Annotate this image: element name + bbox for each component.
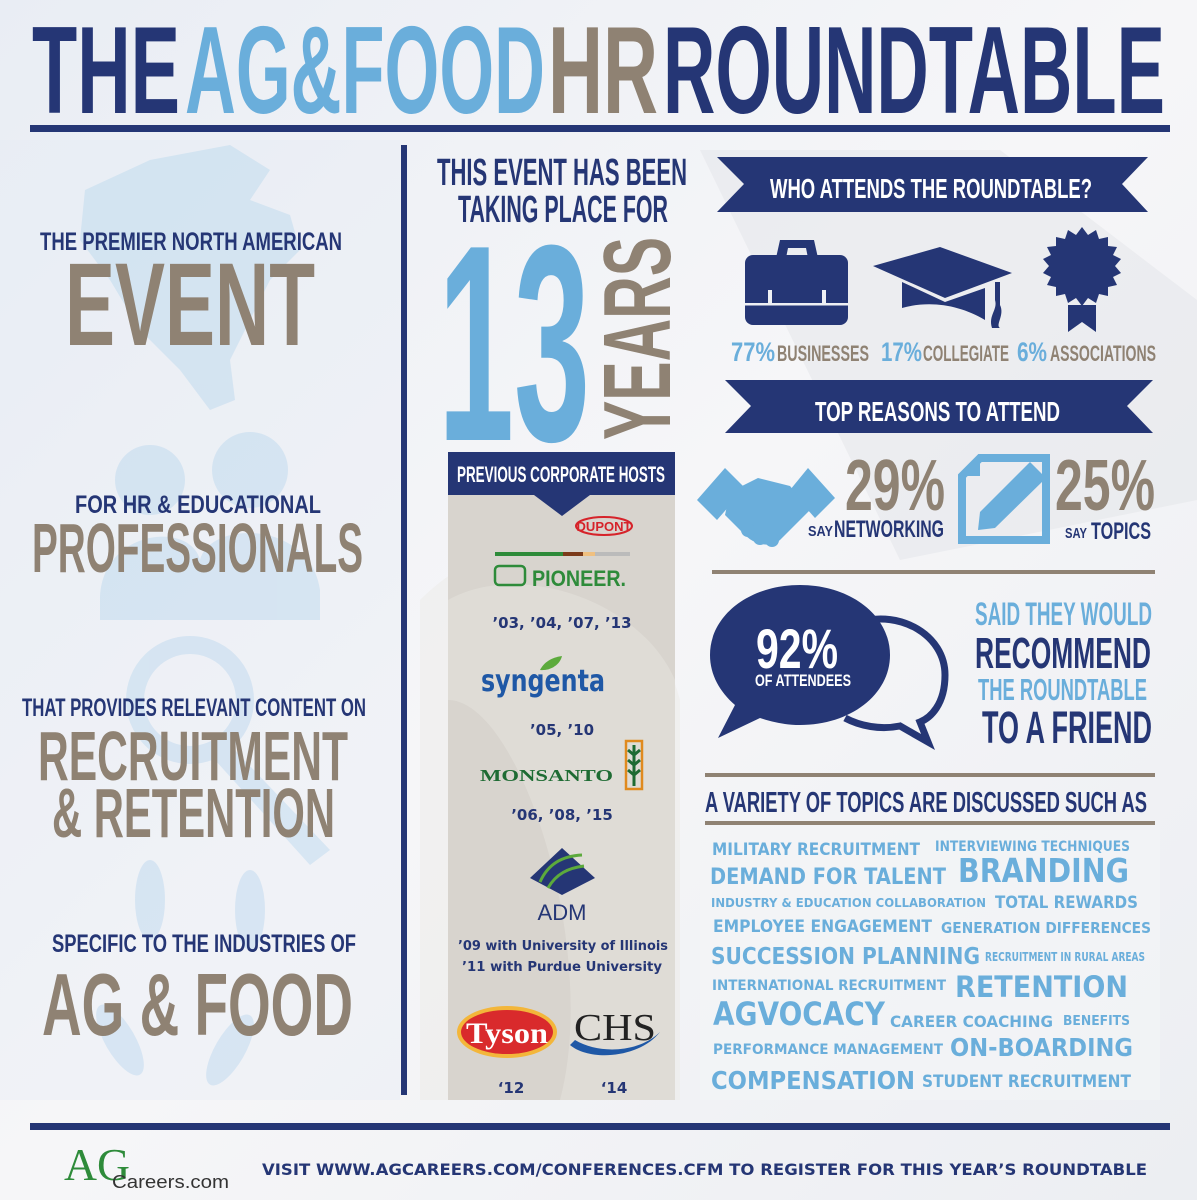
stat: networking: SAY xyxy=(808,523,833,540)
logo: agcareers xyxy=(64,1139,229,1192)
word cloud: topics: PERFORMANCE MANAGEMENT xyxy=(713,1042,943,1058)
logo: adm xyxy=(530,848,595,925)
icon: briefcase xyxy=(745,240,848,325)
word cloud: topics: EMPLOYEE ENGAGEMENT xyxy=(713,917,932,937)
logo: dupont pioneer: PIONEER. xyxy=(532,566,626,591)
stats: attendees breakdown xyxy=(731,337,1156,367)
stat: topics: SAY xyxy=(1065,525,1087,542)
logo: syngenta xyxy=(481,656,605,699)
title: HR xyxy=(548,2,658,140)
panel: previous corporate hosts: PREVIOUS CORPORATE HOSTS xyxy=(457,462,665,487)
13 years block: YEARS xyxy=(584,237,691,440)
word cloud: topics: RETENTION xyxy=(955,970,1128,1004)
text: professionals: PROFESSIONALS xyxy=(32,509,363,587)
text: recruitment & retention: & RETENTION xyxy=(52,774,335,852)
word cloud: topics: MILITARY RECRUITMENT xyxy=(712,840,920,860)
logo: adm: ADM xyxy=(538,900,586,925)
panel: previous corporate hosts: ’09 with University of Illinois xyxy=(458,938,668,954)
word cloud: topics xyxy=(700,830,1160,1100)
word cloud: topics: ON-BOARDING xyxy=(950,1033,1133,1062)
icon: document with pencil xyxy=(962,458,1046,540)
word cloud: topics: STUDENT RECRUITMENT xyxy=(922,1072,1131,1092)
banner: top reasons: TOP REASONS TO ATTEND xyxy=(815,396,1060,427)
text: ag & food xyxy=(42,930,356,1054)
speech bubbles: OF ATTENDEES xyxy=(755,671,851,690)
logo: dupont pioneer xyxy=(495,517,632,591)
text: professionals xyxy=(32,491,363,587)
stat: topics: TOPICS xyxy=(1091,518,1151,545)
word cloud: topics: COMPENSATION xyxy=(711,1066,915,1095)
panel: previous corporate hosts: ’11 with Purdue University xyxy=(462,959,662,975)
stats: attendees breakdown: 77% xyxy=(731,337,775,367)
stat: networking xyxy=(808,446,945,543)
banner: top reasons xyxy=(725,380,1153,433)
background illustration: map, people, magnifier, wheat xyxy=(80,145,330,1092)
word cloud: topics: BENEFITS xyxy=(1063,1014,1130,1029)
panel: previous corporate hosts: ‘14 xyxy=(601,1079,627,1097)
panel: previous corporate hosts: ’06, ’08, ’15 xyxy=(511,806,613,824)
word cloud: topics: INDUSTRY & EDUCATION COLLABORATION xyxy=(711,895,986,910)
speech bubbles xyxy=(710,585,945,742)
title xyxy=(32,2,1165,140)
text: ag & food: SPECIFIC TO THE INDUSTRIES OF xyxy=(52,930,356,958)
13 years block: THIS EVENT HAS BEEN xyxy=(437,152,687,194)
stats: attendees breakdown: COLLEGIATE xyxy=(923,341,1009,366)
speech bubbles: 92% xyxy=(756,617,838,680)
word cloud: topics: SUCCESSION PLANNING xyxy=(711,944,980,970)
text: premier event xyxy=(40,228,342,371)
logo: dupont pioneer: DUPONT xyxy=(577,519,632,534)
banner: who attends xyxy=(717,157,1148,212)
panel: previous corporate hosts xyxy=(448,452,675,1100)
13 years block: TAKING PLACE FOR xyxy=(458,189,668,231)
icon: graduation cap xyxy=(873,247,1012,328)
text: recruitment & retention xyxy=(22,694,366,852)
title: THE xyxy=(32,2,180,140)
logo: tyson: Tyson xyxy=(466,1017,548,1050)
stat: topics: 25% xyxy=(1055,446,1155,526)
stats: attendees breakdown: 17% xyxy=(881,337,922,367)
icon: handshake xyxy=(697,468,835,547)
logo: chs: CHS xyxy=(574,1007,656,1049)
left column text xyxy=(22,228,366,1054)
text: premier event: THE PREMIER NORTH AMERICAN xyxy=(40,228,342,256)
logo: agcareers: Careers.com xyxy=(112,1172,229,1192)
logo: agcareers: AG xyxy=(64,1139,130,1190)
word cloud: topics: AGVOCACY xyxy=(713,995,886,1033)
word cloud: topics: INTERNATIONAL RECRUITMENT xyxy=(712,978,946,994)
logo: tyson xyxy=(457,1006,557,1058)
word cloud: topics: BRANDING xyxy=(958,851,1129,890)
13 years block: 13 xyxy=(438,188,590,500)
icon: rosette award xyxy=(1043,227,1121,332)
stat: networking: 29% xyxy=(845,446,945,526)
stats: attendees breakdown: 6% xyxy=(1017,337,1047,367)
panel: previous corporate hosts: ‘12 xyxy=(498,1079,524,1097)
decorative background shapes xyxy=(0,140,1197,1100)
word cloud: topics: GENERATION DIFFERENCES xyxy=(941,919,1151,937)
logo: monsanto: MONSANTO xyxy=(480,766,613,785)
footer call to action: VISIT WWW.AGCAREERS.COM/CONFERENCES.CFM TO REGISTER FOR THIS YEAR’S ROUNDTABLE xyxy=(262,1160,1147,1179)
panel: previous corporate hosts: ’03, ’04, ’07, ’13 xyxy=(492,614,632,632)
panel: previous corporate hosts: ’05, ’10 xyxy=(530,721,594,739)
title: AG&FOOD xyxy=(185,2,545,140)
word cloud: topics: INTERVIEWING TECHNIQUES xyxy=(935,839,1130,855)
text: recruitment & retention: THAT PROVIDES RELEVANT CONTENT ON xyxy=(22,694,366,722)
text: recommend xyxy=(975,596,1152,753)
logo: monsanto xyxy=(480,741,642,789)
stat: topics xyxy=(1055,446,1155,545)
text: ag & food: AG & FOOD xyxy=(42,955,353,1054)
text: recruitment & retention: RECRUITMENT xyxy=(38,717,348,795)
logo: syngenta: syngenta xyxy=(481,664,605,699)
text: professionals: FOR HR & EDUCATIONAL xyxy=(75,491,321,519)
stats: attendees breakdown: BUSINESSES xyxy=(777,341,869,366)
word cloud: topics: TOTAL REWARDS xyxy=(995,893,1138,913)
word cloud: topics: DEMAND FOR TALENT xyxy=(710,865,946,890)
word cloud: topics: CAREER COACHING xyxy=(890,1012,1053,1031)
stat: networking: NETWORKING xyxy=(834,516,944,543)
text: premier event: EVENT xyxy=(65,239,315,371)
